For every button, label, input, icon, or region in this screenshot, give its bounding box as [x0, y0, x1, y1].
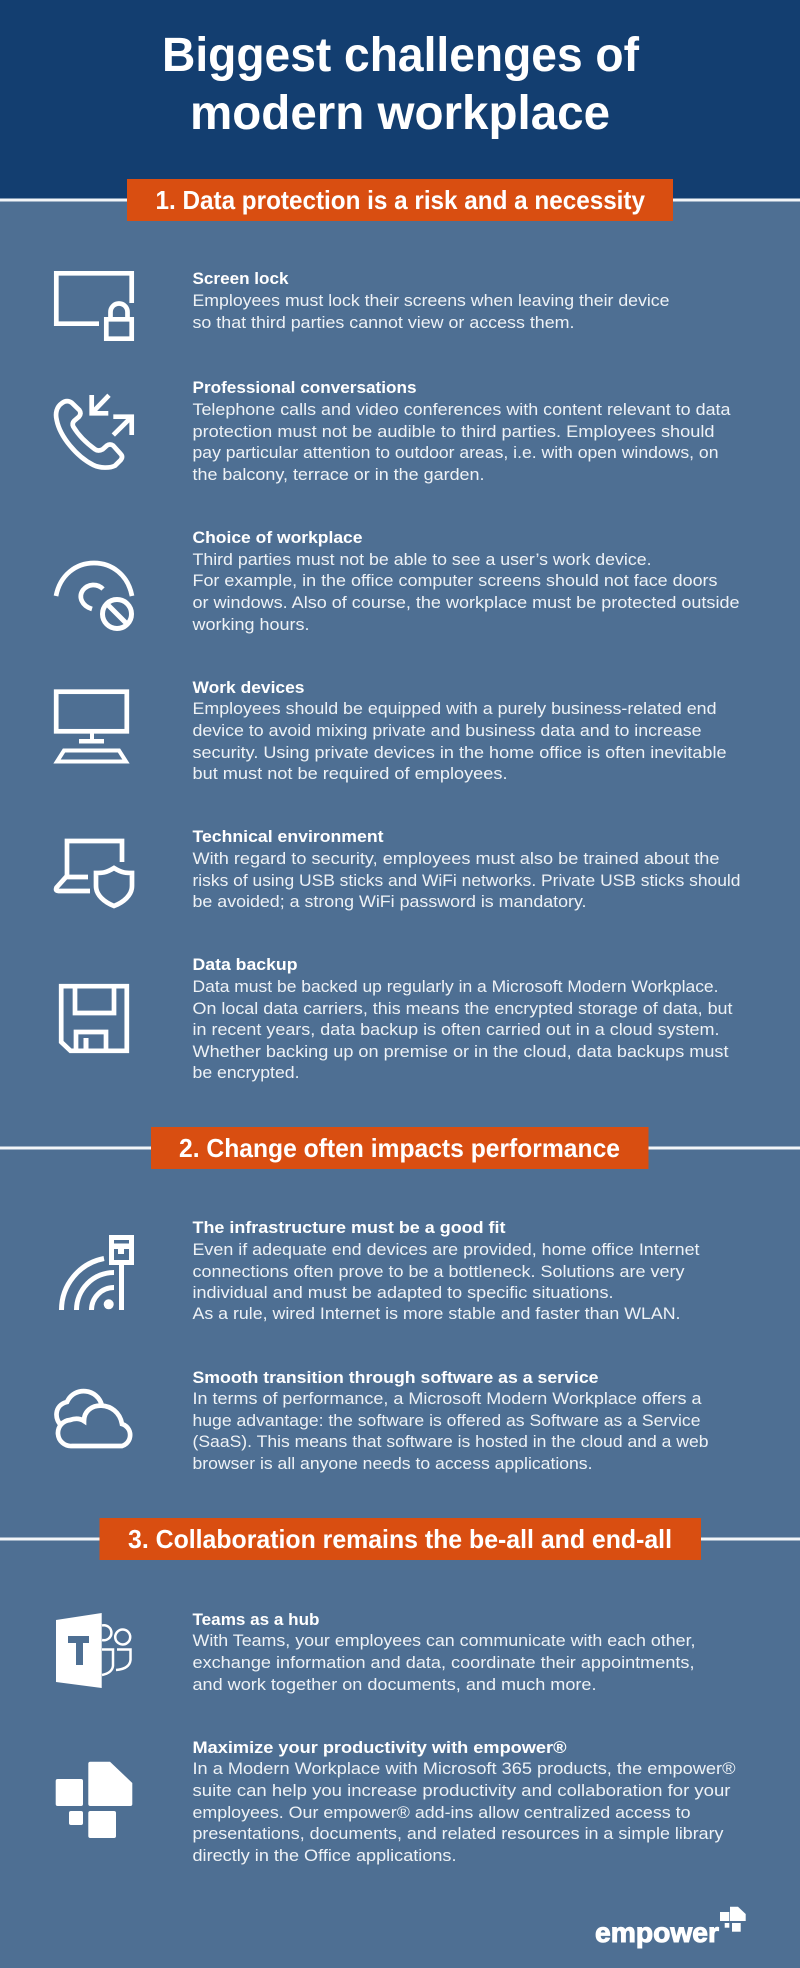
icon: Teams [56, 1613, 130, 1688]
text: data backup [192, 955, 733, 1082]
icon: phone with arrows [56, 395, 132, 468]
text: software as a service: Smooth transition through software as a service [192, 1368, 598, 1387]
text: software as a service: (SaaS). This means that software is hosted in the cloud and a web [192, 1432, 708, 1451]
text: screen lock: Employees must lock their screens when leaving their device [192, 291, 670, 310]
text: work devices: Employees should be equipped with a purely business-related end [192, 699, 716, 718]
panel: section 1 data protection [0, 179, 800, 1082]
text: professional conversations: Professional conversations [192, 378, 416, 397]
text: professional conversations: the balcony, terrace or in the garden. [192, 465, 484, 484]
text: screen lock [192, 269, 670, 332]
text: work devices: Work devices [192, 678, 304, 697]
icon: laptop with shield [56, 841, 132, 906]
text: maximize productivity: suite can help you increase productivity and collaboration for your [192, 1781, 731, 1800]
logo: empower [595, 1907, 746, 1948]
text: Teams as a hub: With Teams, your employees can communicate with each other, [192, 1631, 696, 1650]
text: maximize productivity: directly in the Office applications. [192, 1846, 456, 1865]
text: software as a service: huge advantage: the software is offered as Software as a Service [192, 1411, 700, 1430]
text: work devices: security. Using private devices in the home office is often inevitable [192, 743, 726, 762]
text: data backup: in recent years, data backup is often carried out in a cloud system. [192, 1020, 720, 1039]
section 3 divider and heading: 3. Collaboration remains the be-all and end-all [128, 1524, 672, 1554]
text: technical environment: be avoided; a strong WiFi password is mandatory. [192, 892, 586, 911]
text: screen lock: Screen lock [192, 269, 289, 288]
text: infrastructure: connections often prove to be a bottleneck. Solutions are very [192, 1262, 685, 1281]
panel: section 2 performance [0, 1127, 800, 1473]
text: Teams as a hub: exchange information and data, coordinate their appointments, [192, 1653, 694, 1672]
text: work devices: but must not be required of employees. [192, 764, 508, 783]
title: Biggest challenges of [162, 29, 640, 82]
section 2 divider and heading: 2. Change often impacts performance [179, 1133, 620, 1163]
text: screen lock: so that third parties cannot view or access them. [192, 313, 574, 332]
text: maximize productivity: employees. Our empower® add-ins allow centralized access to [192, 1803, 690, 1822]
icon: clouds [57, 1391, 130, 1446]
icon: wifi and cable [62, 1235, 134, 1310]
text: technical environment: With regard to security, employees must also be trained about the [192, 849, 720, 868]
text: choice of workplace: or windows. Also of course, the workplace must be protected outside [192, 593, 740, 612]
text: technical environment: risks of using USB sticks and WiFi networks. Private USB sticks should [192, 871, 740, 890]
icon: empower symbol [56, 1762, 132, 1838]
text: data backup: On local data carriers, this means the encrypted storage of data, but [192, 999, 733, 1018]
text: data backup: be encrypted. [192, 1063, 300, 1082]
text: software as a service: browser is all anyone needs to access applications. [192, 1454, 592, 1473]
icon: screen lock [56, 273, 132, 339]
text: choice of workplace [191, 528, 740, 634]
title [162, 29, 640, 140]
text: choice of workplace: working hours. [191, 615, 310, 634]
text: professional conversations [192, 378, 731, 484]
text: software as a service [192, 1368, 708, 1473]
text: maximize productivity [192, 1738, 736, 1865]
text: professional conversations: Telephone calls and video conferences with content relevant to data [192, 400, 731, 419]
text: professional conversations: pay particular attention to outdoor areas, i.e. with open windows, on [192, 443, 718, 462]
text: maximize productivity: presentations, documents, and related resources in a simple library [192, 1824, 724, 1843]
text: data backup: Whether backing up on premise or in the cloud, data backups must [192, 1042, 729, 1061]
text: maximize productivity: Maximize your productivity with empower® [192, 1738, 567, 1757]
section 1 divider and heading: 1. Data protection is a risk and a necessity [156, 185, 646, 215]
icon: choice of workplace [56, 563, 132, 628]
section 3 divider and heading [0, 1518, 800, 1560]
text: technical environment: Technical environment [192, 827, 384, 846]
text: Teams as a hub: Teams as a hub [192, 1610, 320, 1629]
section 2 divider and heading [0, 1127, 800, 1169]
text: professional conversations: protection must not be audible to third parties. Employees should [192, 422, 714, 441]
text: work devices [192, 678, 726, 783]
text: Teams as a hub: and work together on documents, and much more. [192, 1675, 596, 1694]
panel: section 3 collaboration [0, 1518, 800, 1865]
text: software as a service: In terms of performance, a Microsoft Modern Workplace offers a [192, 1389, 702, 1408]
text: Teams as a hub [192, 1610, 696, 1694]
icon: desktop computer [56, 692, 127, 762]
text: infrastructure: individual and must be adapted to specific situations. [192, 1283, 614, 1302]
section 1 divider and heading [0, 179, 800, 221]
text: data backup: Data backup [192, 955, 298, 974]
text: choice of workplace: For example, in the office computer screens should not face doors [192, 571, 718, 590]
header band [0, 0, 800, 200]
text: choice of workplace: Choice of workplace [192, 528, 362, 547]
icon: floppy disk [61, 986, 127, 1051]
text: infrastructure [192, 1218, 700, 1323]
text: infrastructure: As a rule, wired Internet is more stable and faster than WLAN. [192, 1304, 680, 1323]
text: infrastructure: Even if adequate end devices are provided, home office Internet [192, 1240, 700, 1259]
text: maximize productivity: In a Modern Workplace with Microsoft 365 products, the empower® [192, 1759, 736, 1778]
text: infrastructure: The infrastructure must be a good fit [192, 1218, 506, 1237]
text: choice of workplace: Third parties must not be able to see a user’s work device. [192, 550, 652, 569]
title: modern workplace [190, 87, 610, 140]
logo: empower: empower [595, 1917, 719, 1948]
text: work devices: device to avoid mixing private and business data and to increase [192, 721, 702, 740]
text: technical environment [192, 827, 740, 911]
text: data backup: Data must be backed up regularly in a Microsoft Modern Workplace. [192, 977, 718, 996]
